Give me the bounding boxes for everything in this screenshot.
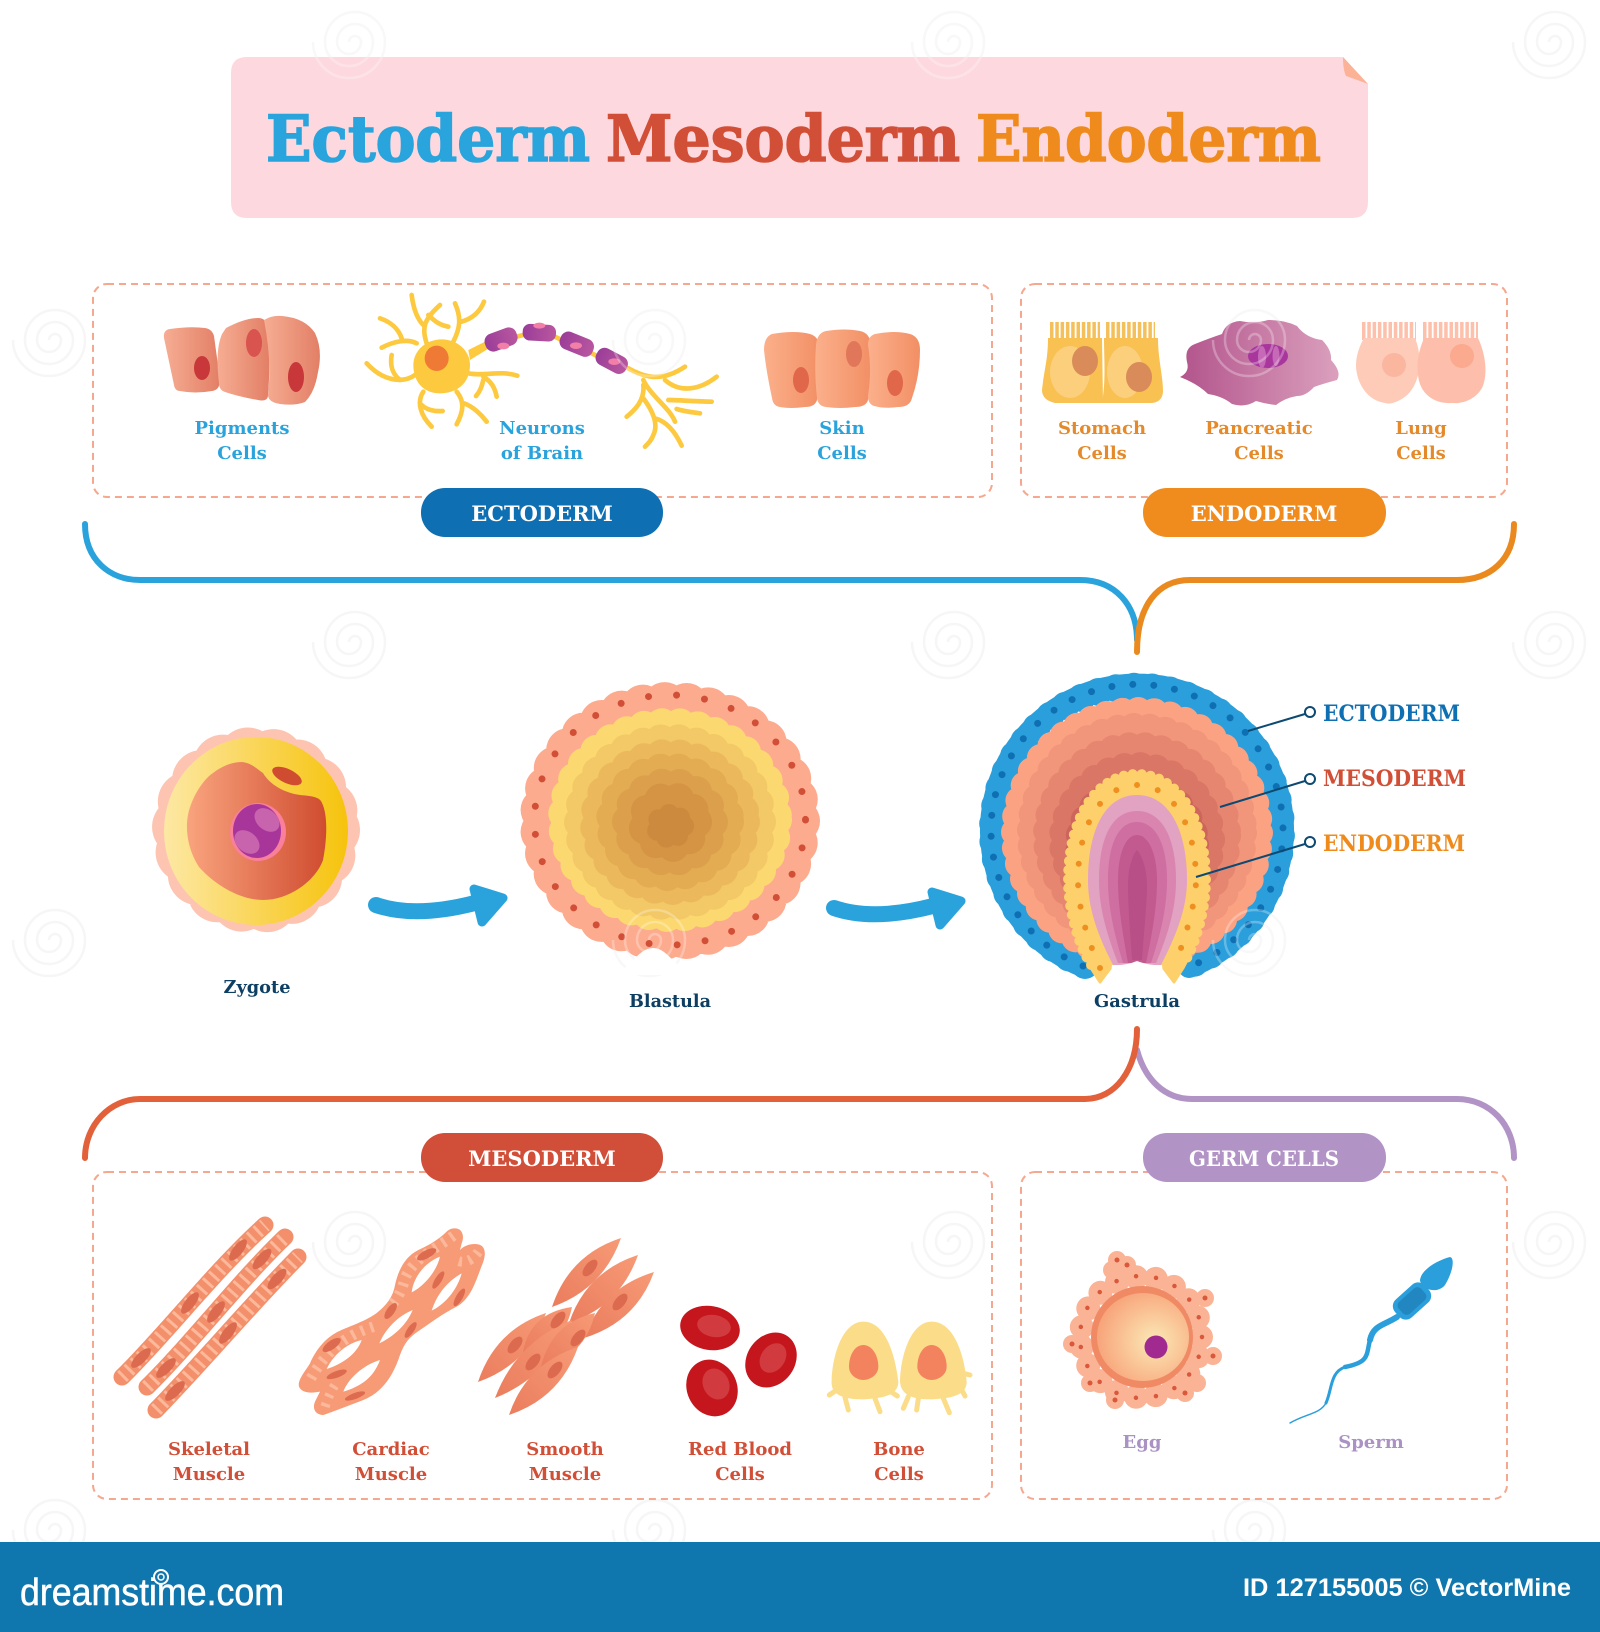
label: skeletal muscle: Skeletal <box>168 1439 250 1460</box>
label: gastrula: Gastrula <box>1094 991 1180 1012</box>
label: egg: Egg <box>1123 1432 1162 1453</box>
cardiac muscle striations <box>310 1236 478 1407</box>
callout: endoderm: ENDODERM <box>1323 831 1465 857</box>
label: smooth muscle: Muscle <box>529 1464 601 1485</box>
label: cardiac muscle: Cardiac <box>352 1439 430 1460</box>
icon: smooth muscle <box>478 1238 654 1415</box>
pill: endoderm: ENDODERM <box>1191 501 1337 526</box>
label: red blood cells: Red Blood <box>688 1439 792 1460</box>
label: blastula: Blastula <box>629 991 711 1012</box>
arrow: zygote to blastula <box>376 889 503 922</box>
footer logo: dreamstime.com: dreamstime.com <box>20 1572 284 1614</box>
label: pancreatic cells: Pancreatic <box>1205 418 1313 439</box>
gastrula mesoderm layers <box>1015 711 1259 955</box>
icon: neuron <box>367 295 717 447</box>
skeletal muscle nuclei <box>128 1237 289 1404</box>
pill: ectoderm <box>421 488 663 537</box>
blastula outer cell nuclei <box>534 695 806 945</box>
title: Mesoderm: Mesoderm <box>606 102 960 177</box>
title: Endoderm: Endoderm <box>976 102 1321 177</box>
gastrula ectoderm ring <box>991 684 1283 967</box>
gastrula diagram <box>991 684 1283 984</box>
callout: endoderm <box>1196 831 1465 877</box>
icon: cardiac muscle <box>299 1228 485 1415</box>
blastula cell <box>534 695 806 975</box>
label: smooth muscle: Smooth <box>526 1439 604 1460</box>
label: pigments cells: Cells <box>217 443 267 464</box>
pill: mesoderm <box>421 1133 663 1182</box>
title: Ectoderm: Ectoderm <box>266 102 590 177</box>
panel: endoderm derivatives <box>1021 284 1507 497</box>
label: stomach cells: Stomach <box>1058 418 1146 439</box>
smooth muscle nuclei <box>505 1257 630 1381</box>
icon: red blood cells <box>677 1301 807 1425</box>
bracket: gastrula to mesoderm <box>85 1029 1137 1158</box>
pill: ectoderm: ECTODERM <box>471 501 613 526</box>
icon: pigment cells <box>164 316 320 405</box>
label: neurons of brain: of Brain <box>501 443 583 464</box>
panel: germ cells <box>1021 1172 1507 1499</box>
label: lung cells: Cells <box>1396 443 1446 464</box>
blastula inner yellow layers <box>564 724 776 916</box>
zygote cell <box>164 737 348 925</box>
arrow: blastula to gastrula <box>834 892 961 925</box>
gastrula endoderm layer <box>1067 773 1207 982</box>
label: cardiac muscle: Muscle <box>355 1464 427 1485</box>
pill: germ cells <box>1143 1133 1386 1182</box>
callout: ectoderm: ECTODERM <box>1323 701 1460 727</box>
footer bar <box>0 1542 1600 1632</box>
bracket: endoderm to gastrula <box>1137 524 1514 652</box>
label: sperm: Sperm <box>1338 1432 1404 1453</box>
pill: germ cells: GERM CELLS <box>1189 1146 1339 1171</box>
icon: skin cells <box>764 330 920 408</box>
icon: lung cells <box>1356 331 1485 404</box>
title banner <box>231 57 1368 218</box>
label: skin cells: Skin <box>819 418 865 439</box>
cardiac muscle nuclei <box>320 1246 467 1402</box>
callout: mesoderm <box>1220 766 1466 807</box>
blastula blastopore notch <box>612 948 694 975</box>
label: zygote: Zygote <box>224 977 290 998</box>
icon: bone cells <box>829 1322 970 1413</box>
callout: ectoderm <box>1248 701 1460 731</box>
label: pigments cells: Pigments <box>194 418 290 439</box>
label: pancreatic cells: Cells <box>1234 443 1284 464</box>
footer image id: ID 127155005 © VectorMine <box>1243 1574 1571 1602</box>
label: neurons of brain: Neurons <box>499 418 585 439</box>
callout: mesoderm: MESODERM <box>1323 766 1466 792</box>
banner corner fold <box>1343 57 1368 84</box>
label: bone cells: Cells <box>874 1464 924 1485</box>
pill: mesoderm: MESODERM <box>468 1146 616 1171</box>
icon: stomach cells <box>1042 331 1163 403</box>
icon: pancreatic cell <box>1180 320 1339 405</box>
label: skin cells: Cells <box>817 443 867 464</box>
label: bone cells: Bone <box>873 1439 925 1460</box>
label: skeletal muscle: Muscle <box>173 1464 245 1485</box>
label: lung cells: Lung <box>1395 418 1447 439</box>
bracket: gastrula to germ cells <box>1137 1050 1514 1158</box>
panel: mesoderm derivatives <box>93 1172 992 1499</box>
icon: skeletal muscle fibers <box>122 1225 298 1410</box>
label: stomach cells: Cells <box>1077 443 1127 464</box>
label: red blood cells: Cells <box>715 1464 765 1485</box>
bracket: ectoderm to gastrula <box>85 524 1137 640</box>
icon: sperm <box>1290 1257 1453 1423</box>
gastrula archenteron pink layers <box>1088 795 1187 984</box>
icon: egg <box>1063 1251 1222 1409</box>
panel: ectoderm derivatives <box>93 284 992 497</box>
pill: endoderm <box>1143 488 1386 537</box>
